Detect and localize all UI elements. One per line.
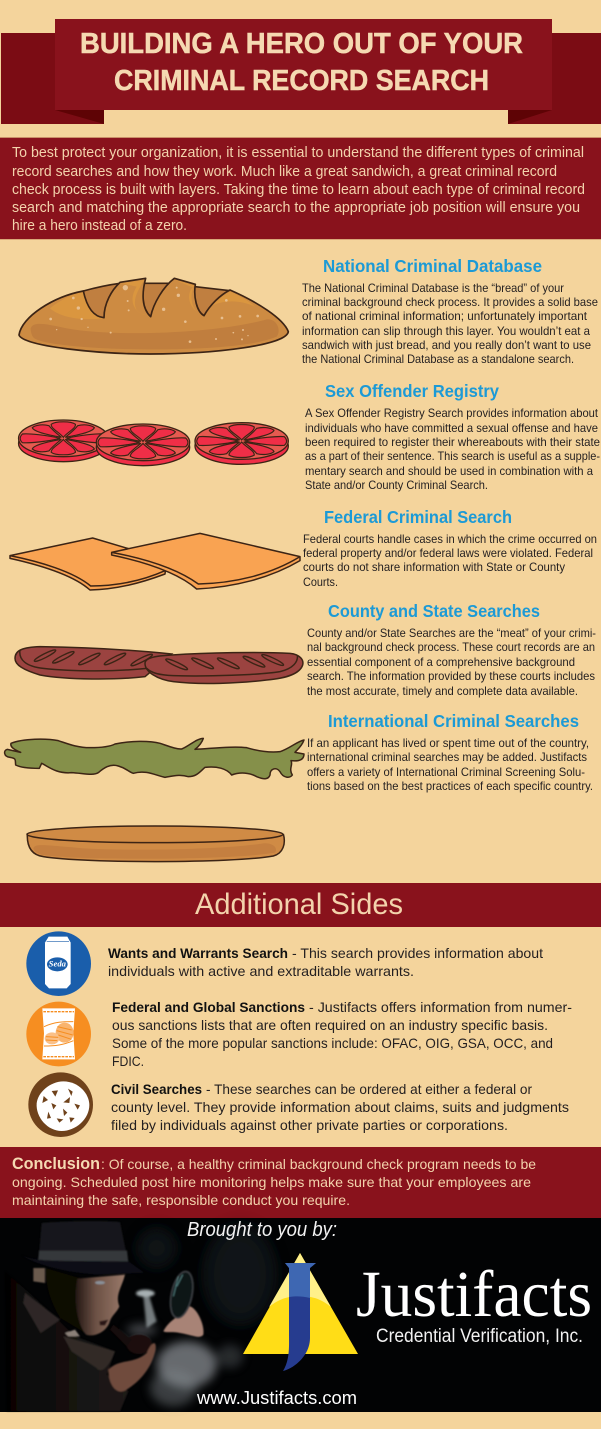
title text: BUILDING A HERO OUT OF YOUR [80,28,523,60]
intro text: search and matching the appropriate search to the appropriate job position will ensure you [12,200,580,216]
heading band: Additional Sides: Additional Sides [195,888,403,921]
coat [5,1271,128,1411]
section: International Criminal Searches [307,711,593,793]
conclusion text: : Of course, a healthy criminal background check program needs to be [101,1156,536,1172]
body text: If an applicant has lived or spent time out of the country, [307,736,589,750]
panel: introduction [0,137,601,240]
caption: brought to you by: Brought to you by: [187,1219,337,1241]
body text: the most accurate, timely and complete data available. [307,684,578,698]
website url: www.Justifacts.com [196,1388,357,1408]
icon: soda can: Seda [49,959,67,969]
pipe [126,1334,152,1354]
conclusion text [12,1154,536,1208]
intro text: hire a hero instead of a zero. [12,218,187,234]
heading: Federal Criminal Search [324,507,512,527]
text: Federal and Global Sanctions: Some of the more popular sanctions include: OFAC, OIG, GSA, OCC, and [112,1036,553,1051]
body text [305,406,600,492]
icon: cookie [28,1072,93,1137]
section: National Criminal Database [302,256,598,366]
intro text: To best protect your organization, it is essential to understand the different types of criminal [12,145,584,161]
banner panel [55,19,552,110]
intro text [12,145,585,234]
ribbon: right tail [508,33,601,124]
body text [303,532,597,589]
text: Federal and Global Sanctions [112,1000,572,1069]
text: Wants and Warrants: individuals with active and extraditable warrants. [108,964,414,979]
panel: sponsor footer [0,1218,601,1412]
panel: conclusion [0,1147,601,1218]
section: Federal Criminal Search [303,507,597,589]
text: Federal and Global Sanctions: ous sanctions lists that are often required on an industry specific basis. [112,1018,548,1033]
intro text: record searches and how they work. Much like a great sandwich, a great criminal record [12,164,557,180]
body text: Courts. [303,575,338,589]
illustration: lettuce [5,738,304,779]
magnifier hand [163,1306,204,1337]
body text [307,626,596,698]
illustration: meat patties [15,647,303,683]
heading: International Criminal Searches [328,711,579,731]
body text: courts do not share information with State or County [303,560,565,574]
text: Civil Searches: - These searches can be ordered at either a federal or [206,1082,532,1097]
face [76,1275,125,1335]
illustration: cheese slices [10,533,300,590]
hair and ear [33,1268,45,1283]
title text: CRIMINAL RECORD SEARCH [114,65,489,97]
text: Civil Searches: filed by individuals against other private parties or corporations. [111,1118,508,1133]
ribbon: left tail [1,33,104,124]
text: Civil Searches [111,1082,569,1133]
body text: of national criminal information; unfortunately important [302,309,588,323]
photo: detective with magnifying glass and pipe [5,1221,277,1411]
text: Wants and Warrants: - This search provides information about [292,946,543,961]
text: Wants and Warrants [108,946,543,979]
text: Federal and Global Sanctions: Federal and Global Sanctions [112,1000,305,1015]
hat [38,1221,128,1263]
ribbon: right fold [508,110,552,124]
heading: County and State Searches [328,601,540,621]
body text: offers a variety of International Criminal Screening Solu- [307,765,585,779]
smoke [127,1324,243,1406]
title banner [1,19,601,124]
ribbon: left fold [55,110,104,124]
heading: Sex Offender Registry [325,381,499,401]
conclusion text: maintaining the safe, responsible conduct you require. [12,1192,350,1208]
body text [302,281,598,366]
heading: National Criminal Database [323,256,542,276]
body text: State and/or County Criminal Search. [305,478,488,492]
illustration: bottom bread bun [27,826,284,862]
magnifying glass [167,1269,197,1320]
body text: The National Criminal Database is the “bread” of your [302,281,564,295]
intro text: check process is built with layers. Taking the time to learn about each type of criminal record [12,182,585,198]
logo: Justifacts wordmark: Justifacts [356,1258,592,1331]
illustration: top bread bun [19,278,288,354]
text: Civil Searches: county level. They provide information about claims, suits and judgments [111,1100,569,1115]
illustration: tomato slices [19,420,288,466]
pipe hand [108,1343,156,1392]
body text: essential component of a comprehensive background [307,655,575,669]
text: Civil Searches: Civil Searches [111,1082,202,1097]
body text [307,736,593,793]
title text [80,28,523,97]
text: Federal and Global Sanctions: - Justifacts offers information from numer- [309,1000,572,1015]
logo: Justifacts triangle [243,1253,358,1371]
body text: the National Criminal Database as a standalone search. [302,352,574,366]
text: Wants and Warrants: Wants and Warrants Search [108,946,288,961]
text: Federal and Global Sanctions: FDIC. [112,1054,144,1069]
conclusion text: Conclusion [12,1154,100,1173]
heading band: Additional Sides [0,883,601,927]
icon: chip bag [26,1002,91,1066]
body text: international criminal searches may be added. Justifacts [307,750,587,764]
conclusion text: ongoing. Scheduled post hire monitoring helps make sure that your employees are [12,1174,531,1190]
logo: tagline: Credential Verification, Inc. [376,1326,583,1347]
body text: sandwich with just bread, and you really don’t want to use [302,338,591,352]
body text: information can slip through this layer. You wouldn’t eat a [302,324,590,338]
icon: soda can [26,931,91,996]
section: Sex Offender Registry [305,381,600,492]
section: County and State Searches [307,601,596,698]
